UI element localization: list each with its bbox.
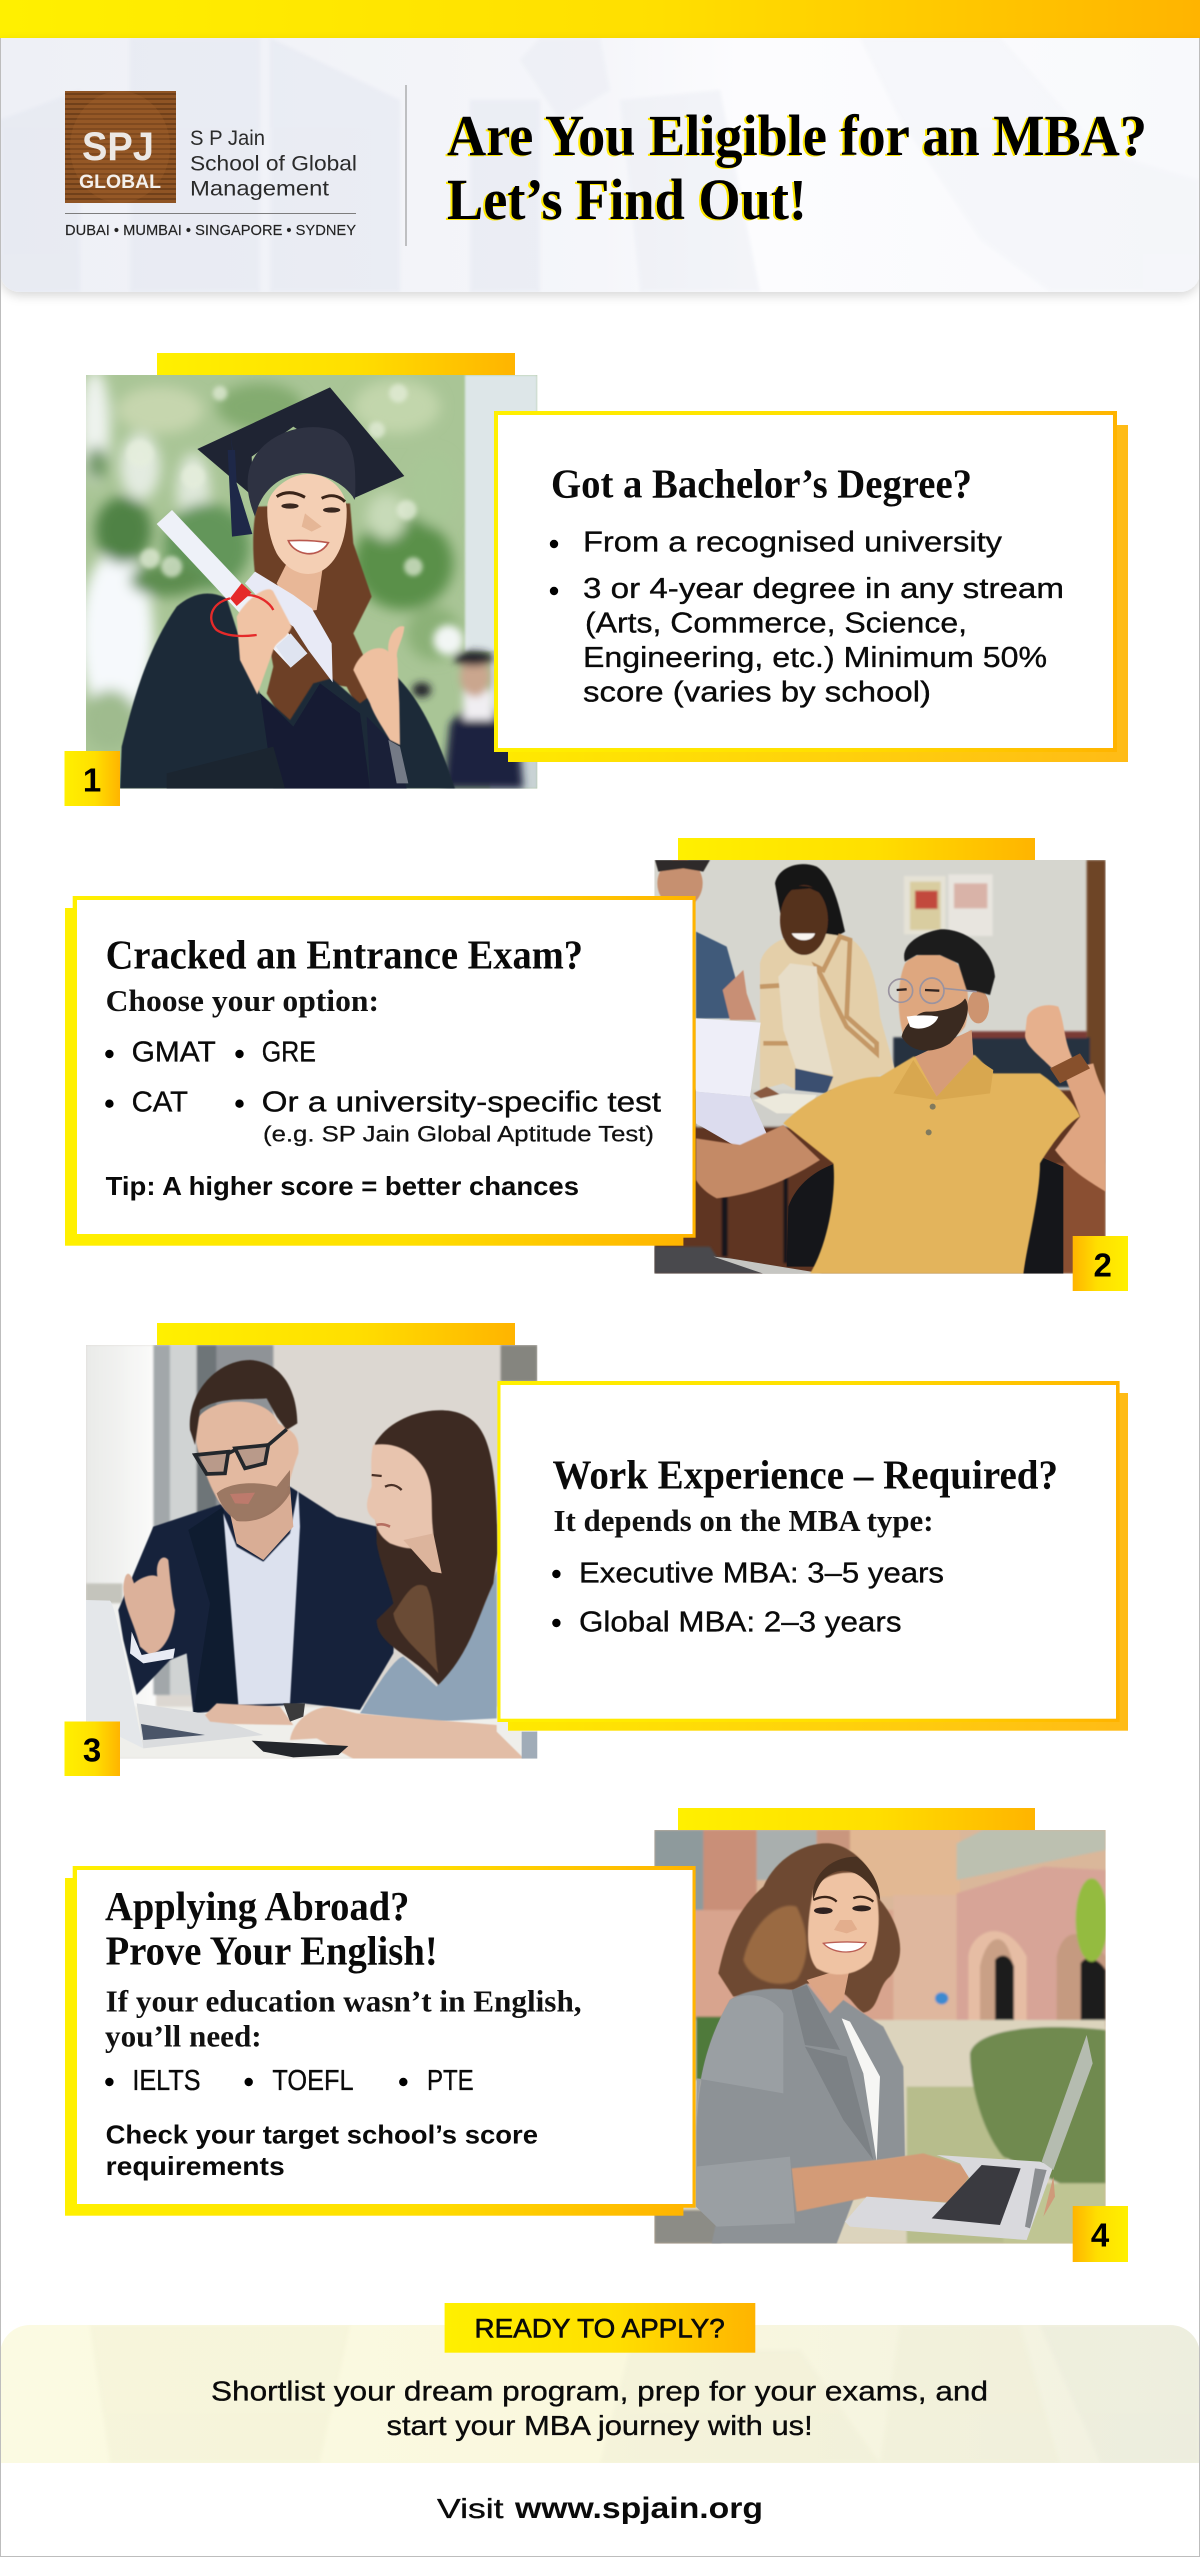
bullet list: Or a university-specific test bbox=[262, 1087, 661, 1119]
heading: Work Experience – Required? bbox=[552, 1451, 1058, 1497]
laptop foreground bbox=[654, 1247, 807, 1274]
woman's hands and arm bbox=[290, 1707, 524, 1759]
neck bbox=[230, 1487, 293, 1560]
number badge 4: 4 bbox=[1091, 2217, 1110, 2254]
bullet list: TOEFL bbox=[272, 2065, 354, 2097]
number badge 3: 3 bbox=[83, 1732, 101, 1769]
chair bbox=[787, 1157, 1063, 1274]
right arm and fist bbox=[1055, 1063, 1106, 1192]
beard bbox=[902, 998, 968, 1051]
logo: DUBAI • MUMBAI • SINGAPORE • SYDNEY bbox=[65, 222, 356, 239]
text card 3 bbox=[497, 1381, 1128, 1731]
shirt bbox=[783, 1055, 1080, 1274]
logo: SPJ bbox=[82, 125, 154, 169]
hair back bbox=[718, 1843, 900, 2013]
number badge 2: 2 bbox=[1094, 1247, 1112, 1284]
tassel bbox=[228, 432, 252, 537]
logo bbox=[65, 91, 357, 239]
text card 2 bbox=[65, 896, 696, 1246]
hand with scroll bbox=[237, 589, 292, 694]
photo: student with laptop on campus bbox=[654, 1830, 1108, 2244]
brows eyes bbox=[277, 493, 345, 502]
subheading: If your education wasn’t in English, bbox=[106, 1984, 582, 2019]
bullet list: Executive MBA: 3–5 years bbox=[579, 1557, 944, 1589]
footer call to action band bbox=[0, 2303, 1200, 2463]
woman's top bbox=[360, 1570, 497, 1722]
hair back bbox=[253, 503, 372, 733]
left man bbox=[655, 858, 756, 1020]
bullet list: score (varies by school) bbox=[583, 677, 931, 709]
panel: step 1 bachelor's degree bbox=[64, 353, 1128, 806]
bullet list: (Arts, Commerce, Science, bbox=[585, 608, 967, 640]
call to action text bbox=[211, 2376, 988, 2441]
accent bar bbox=[157, 353, 515, 375]
subheading bbox=[105, 1984, 582, 2054]
top gradient bar bbox=[0, 0, 1200, 38]
cap bbox=[197, 387, 404, 498]
laptop bbox=[86, 1600, 143, 1748]
note: requirements bbox=[106, 2151, 285, 2181]
thumb up hand bbox=[353, 626, 404, 745]
smile bbox=[288, 540, 328, 554]
website link bbox=[437, 2492, 763, 2525]
bullet list: IELTS bbox=[132, 2065, 200, 2097]
face bbox=[195, 1402, 299, 1521]
bullet list: CAT bbox=[132, 1087, 188, 1119]
papers bbox=[696, 1018, 761, 1097]
woman's hair bbox=[375, 1410, 497, 1685]
bullet list bbox=[105, 2065, 474, 2097]
glasses bbox=[195, 1429, 287, 1474]
subheading: you’ll need: bbox=[105, 2019, 262, 2054]
bullet list bbox=[552, 1557, 944, 1639]
number badge 3 bbox=[64, 1722, 120, 1776]
neck bbox=[277, 563, 323, 613]
title bbox=[447, 103, 1147, 232]
website link: www.spjain.org bbox=[514, 2492, 763, 2525]
header panel bbox=[0, 38, 1200, 292]
raised hand bbox=[123, 1557, 175, 1655]
bullet list bbox=[550, 527, 1064, 709]
heading: Got a Bachelor’s Degree? bbox=[551, 461, 972, 507]
heading: Applying Abroad? bbox=[105, 1883, 409, 1929]
title: Are You Eligible for an MBA? bbox=[447, 103, 1147, 168]
subheading: It depends on the MBA type: bbox=[554, 1503, 934, 1538]
collar bbox=[245, 572, 333, 682]
bullet list: 3 or 4-year degree in any stream bbox=[583, 573, 1064, 605]
bullet list: (e.g. SP Jain Global Aptitude Test) bbox=[263, 1122, 654, 1147]
face bbox=[267, 474, 347, 574]
beard bbox=[217, 1470, 290, 1521]
arm bbox=[792, 2153, 975, 2212]
note bbox=[106, 2119, 538, 2181]
hair bbox=[904, 929, 995, 995]
number badge 1: 1 bbox=[83, 762, 101, 799]
subheading: Choose your option: bbox=[106, 983, 379, 1018]
diploma bbox=[157, 510, 307, 668]
woman bbox=[753, 864, 895, 1113]
heading: Cracked an Entrance Exam? bbox=[106, 931, 583, 977]
number badge 4 bbox=[1073, 2206, 1128, 2262]
jacket bbox=[696, 1983, 905, 2244]
logo: GLOBAL bbox=[79, 172, 161, 193]
heading bbox=[105, 1883, 438, 1973]
bullet list: Global MBA: 2–3 years bbox=[579, 1607, 902, 1639]
accent bar bbox=[678, 838, 1035, 860]
panel: step 3 work experience bbox=[64, 1323, 1128, 1776]
front hair lock bbox=[813, 1857, 880, 1900]
ready to apply button: READY TO APPLY? bbox=[474, 2314, 725, 2344]
laptop bbox=[845, 2155, 1053, 2240]
photo: graduate with diploma bbox=[80, 370, 537, 789]
panel: step 4 english test bbox=[65, 1808, 1128, 2262]
bullet list: Engineering, etc.) Minimum 50% bbox=[583, 642, 1047, 674]
panel: step 2 entrance exam bbox=[65, 838, 1128, 1291]
number badge 1 bbox=[64, 751, 120, 806]
bullet list: PTE bbox=[427, 2065, 474, 2097]
gown bbox=[120, 593, 455, 789]
ribbon bbox=[230, 583, 252, 606]
logo: Management bbox=[190, 178, 329, 201]
title: Let’s Find Out! bbox=[447, 167, 807, 232]
accent bar bbox=[157, 1323, 515, 1345]
number badge 2 bbox=[1073, 1236, 1128, 1291]
bullet list bbox=[105, 1037, 661, 1147]
call to action text: start your MBA journey with us! bbox=[386, 2410, 813, 2441]
head bbox=[898, 954, 968, 1036]
website link: Visit bbox=[437, 2493, 504, 2524]
heading: Prove Your English! bbox=[106, 1927, 438, 1973]
calculator bbox=[252, 1741, 348, 1757]
call to action text: Shortlist your dream program, prep for your exams, and bbox=[211, 2376, 988, 2407]
bullet list: GRE bbox=[262, 1037, 316, 1069]
bullet list: From a recognised university bbox=[583, 527, 1003, 559]
photo: students celebrating bbox=[654, 858, 1106, 1274]
hair bbox=[190, 1360, 297, 1445]
white shirt bbox=[842, 2018, 880, 2162]
logo: S P Jain bbox=[190, 127, 265, 150]
note: Check your target school’s score bbox=[106, 2119, 538, 2149]
accent bar bbox=[678, 1808, 1035, 1830]
tip: Tip: A higher score = better chances bbox=[106, 1171, 579, 1201]
shirt bbox=[223, 1488, 300, 1705]
neck bbox=[807, 1967, 863, 2070]
glasses bbox=[889, 978, 977, 1003]
man's hands bbox=[205, 1703, 293, 1725]
left arm bbox=[696, 1125, 820, 1198]
text card 4 bbox=[65, 1866, 696, 2216]
bullet list: GMAT bbox=[132, 1037, 216, 1069]
photo: colleagues at laptop bbox=[86, 1345, 537, 1759]
jacket bbox=[118, 1487, 397, 1713]
neck bbox=[915, 1030, 973, 1097]
text card 1 bbox=[494, 411, 1128, 762]
woman's face bbox=[367, 1444, 433, 1548]
face bbox=[808, 1873, 879, 1975]
logo: School of Global bbox=[190, 153, 357, 176]
ready to apply button bbox=[445, 2303, 755, 2353]
